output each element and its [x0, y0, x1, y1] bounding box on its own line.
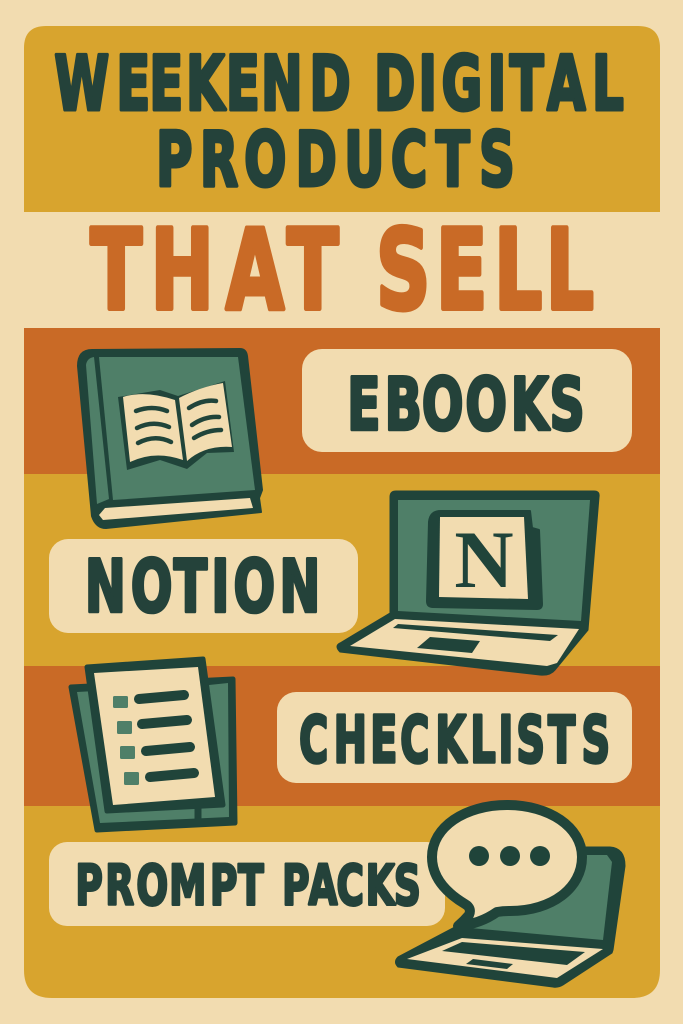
icon: laptop with speech bubble [396, 805, 625, 987]
icon: laptop with notion logo: N [454, 514, 514, 605]
icon: open book [78, 349, 262, 528]
label: notion [49, 539, 358, 633]
panel: striped content background [24, 328, 660, 998]
title: weekend digital products: PRODUCTS [156, 116, 515, 203]
icon: checklist papers [71, 659, 235, 830]
icon: laptop with notion logo [337, 491, 599, 675]
subtitle: that sell: THAT SELL [91, 207, 594, 335]
label: ebooks [302, 349, 632, 452]
label: checklists: CHECKLISTS [299, 703, 610, 778]
label: prompt packs: PROMPT PACKS [75, 854, 421, 919]
label: prompt packs [49, 842, 445, 926]
panel: title banner [24, 26, 660, 212]
label: notion: NOTION [85, 545, 320, 629]
label: ebooks: EBOOKS [347, 363, 585, 447]
title: weekend digital products: WEEKEND DIGITAL [55, 40, 624, 127]
title: weekend digital products [55, 40, 624, 203]
